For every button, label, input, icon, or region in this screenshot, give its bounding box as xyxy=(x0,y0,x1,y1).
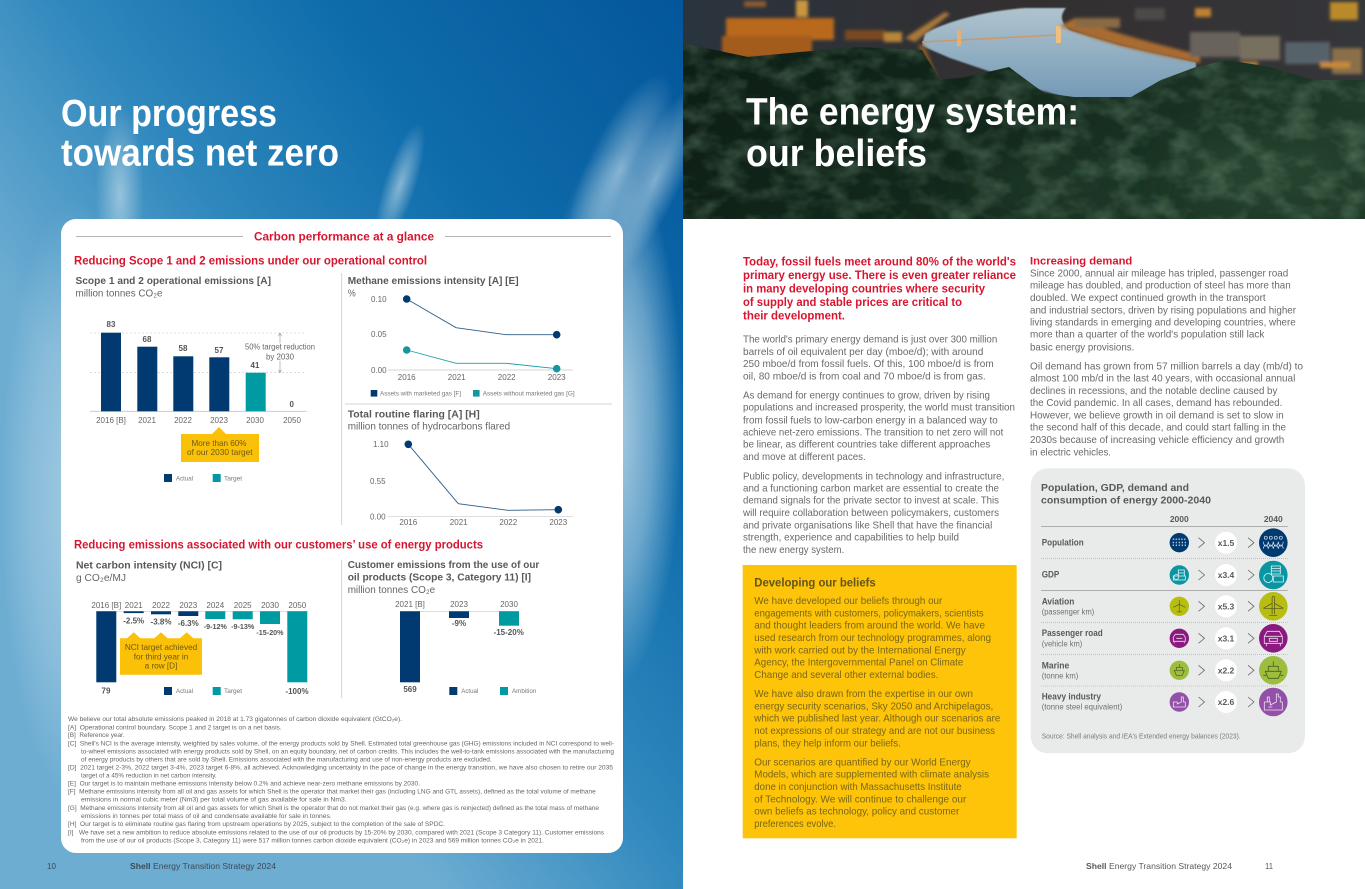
title: right page xyxy=(746,92,1079,175)
icon: passenger road small xyxy=(1170,629,1189,648)
bar chart: net carbon intensity: 2022 xyxy=(152,601,170,610)
footnotes: from the use of our oil products (Scope 3, Category 11) were 517 million tonnes carbon dioxide equivalent (CO₂e) in 2023 and 569 million tonnes CO₂e in 2021. xyxy=(81,838,544,845)
photo: forest silhouette xyxy=(683,43,1365,219)
callout text: not expressions of our strategy and are not our business xyxy=(754,725,995,737)
callout text: with work carried out by the International Energy xyxy=(753,645,966,657)
title: left page xyxy=(61,93,339,174)
body text: primary energy demand: demand signals for the private sector to invest at scale. This xyxy=(743,495,999,507)
bar chart: customer emissions: 569 xyxy=(403,685,417,694)
annotation: 50% target reduction arrow xyxy=(245,333,315,373)
footnotes: of energy products by others that are sold by Shell. Emissions associated with the manufacturing and use of non-energy products are excluded. xyxy=(81,757,492,764)
icon: heavy industry large xyxy=(1259,688,1288,716)
legend: Actual xyxy=(176,476,194,482)
text block: increasing demand: more than a quarter of the world's population still lack xyxy=(1030,329,1265,341)
panel heading: Population, GDP, demand and xyxy=(1041,482,1189,494)
lead paragraph: of supply and stable prices are critical to xyxy=(743,297,962,309)
callout text: plans, they help inform our beliefs. xyxy=(754,737,901,749)
bar chart: customer emissions xyxy=(348,559,539,695)
footnotes: emissions in normal cubic meter (Nm3) per total volume of gas available for sale in Nm3. xyxy=(81,797,347,804)
bar chart: scope 1 and 2 operational emissions: 2022 xyxy=(174,416,192,425)
lead paragraph xyxy=(743,256,1016,322)
text block: increasing demand: 2030s because of increasing vehicle efficiency and growth xyxy=(1030,434,1284,446)
bar chart: customer emissions: 2023 xyxy=(450,600,468,609)
bar chart: net carbon intensity: -15-20% xyxy=(256,628,284,637)
photo: castle xyxy=(722,0,950,88)
body text: primary energy demand: As demand for energy continues to grow, driven by rising xyxy=(743,390,990,402)
bar chart: scope 1 and 2 operational emissions: 2050 xyxy=(283,416,301,425)
section heading: scope 1 and 2: Reducing Scope 1 and 2 emissions under our operational control xyxy=(74,254,427,268)
lead paragraph: Today, fossil fuels meet around 80% of the world's xyxy=(743,256,1016,268)
bar chart: scope 1 and 2 operational emissions: 58 xyxy=(179,344,188,353)
row: passenger road: x3.1 xyxy=(1218,633,1235,643)
bar chart: net carbon intensity: 2024 xyxy=(206,601,225,610)
lead paragraph: their development. xyxy=(743,310,845,322)
bar chart: customer emissions: oil products (Scope 3, Category 11) [I] xyxy=(348,572,531,584)
body text: primary energy demand: the new energy system. xyxy=(743,544,844,556)
footnotes xyxy=(68,716,614,845)
footnotes: [G] Methane emissions intensity from all oil and gas assets for which Shell is the operator that do not market their gas (e.g. where gas is reinjected) defined as the total mass of methane xyxy=(68,805,599,812)
row: aviation xyxy=(1042,592,1288,621)
icon: heavy industry small xyxy=(1170,692,1189,712)
text block: increasing demand: and industrial sectors, driven by rising populations and higher xyxy=(1030,304,1296,316)
bar chart: customer emissions: 2030 xyxy=(500,600,518,609)
legend: Actual xyxy=(176,688,194,695)
legend: Assets without marketed gas [G] xyxy=(483,390,575,398)
bar chart: customer emissions: Customer emissions from the use of our xyxy=(348,559,539,571)
callout text: engagements with customers, policymakers, scientists xyxy=(754,608,984,620)
panel: population, GDP, demand and consumption xyxy=(1031,468,1305,753)
section heading: customers: Reducing emissions associated with our customers’ use of energy products xyxy=(74,538,483,552)
footnotes: [C] Shell's NCI is the average intensity, weighted by sales volume, of the energy products sold by Shell. Estimated total greenhouse gas (GHG) emissions included in NCI correspond to well- xyxy=(68,741,614,748)
footer: right page: Shell Energy Transition Strategy 2024 xyxy=(1086,861,1232,871)
icon: aviation large xyxy=(1259,592,1288,621)
footnotes: emissions in tonnes per total mass of oil and condensate available for sale in tonnes. xyxy=(81,813,332,820)
title: left page: towards net zero xyxy=(61,132,339,174)
body text: primary energy demand xyxy=(742,334,1015,556)
legend xyxy=(164,474,242,482)
line chart: methane emissions intensity: 2023 xyxy=(548,373,566,382)
row: GDP: x3.4 xyxy=(1218,570,1235,580)
bar chart: customer emissions: -15-20% xyxy=(494,628,524,637)
callout text: done in conjunction with Massachusetts Institute xyxy=(754,781,962,793)
row: passenger road: Passenger road xyxy=(1042,628,1103,638)
line chart: total routine flaring: Total routine flaring [A] [H] xyxy=(348,408,480,420)
body text: primary energy demand: be linear, as different countries take different approaches xyxy=(743,439,990,451)
body text: primary energy demand: barrels of oil equivalent per day (mboe/d); with around xyxy=(743,346,983,358)
bar chart: customer emissions: 2021 [B] xyxy=(395,600,425,609)
lead paragraph: primary energy use. There is even greater reliance xyxy=(743,270,1016,282)
panel: carbon performance at a glance xyxy=(61,219,623,853)
footer: left page: 10 xyxy=(47,861,56,871)
text block: increasing demand: declines in recessions, and the notable decline caused by xyxy=(1030,385,1278,397)
footer: left page xyxy=(47,861,276,871)
legend xyxy=(449,687,537,695)
text block: increasing demand xyxy=(1030,256,1303,458)
row: aviation: x5.3 xyxy=(1218,601,1235,611)
line chart: methane emissions intensity: 0.05 xyxy=(371,330,387,339)
annotation: 50% target reduction arrow: by 2030 xyxy=(266,352,295,362)
photo: far bank and city xyxy=(1060,2,1362,74)
bar chart: net carbon intensity: -9-13% xyxy=(231,622,255,631)
legend: Target xyxy=(224,476,242,482)
panel heading: consumption of energy 2000-2040 xyxy=(1041,494,1211,506)
callout: more than 60% of our 2030 target: More than 60% xyxy=(192,439,246,448)
icon: GDP small xyxy=(1170,565,1189,585)
line chart: total routine flaring: 0.55 xyxy=(370,477,386,486)
icon: aviation small xyxy=(1170,597,1189,616)
callout text: used research from our technology programmes, along xyxy=(754,632,991,644)
icon: marine large xyxy=(1259,656,1288,685)
bar chart: scope 1 and 2 operational emissions: 2023 xyxy=(210,416,228,425)
line chart: methane emissions intensity: 0.10 xyxy=(371,295,387,304)
text block: increasing demand: the Covid pandemic. In all cases, demand has rebounded. xyxy=(1030,397,1282,409)
row: heavy industry xyxy=(1042,688,1288,716)
footer: left page: Shell Energy Transition Strategy 2024 xyxy=(130,861,276,871)
line chart: methane emissions intensity: 0.00 xyxy=(371,366,387,375)
bar chart: customer emissions: -9% xyxy=(452,619,466,628)
callout text: of Technology. We will continue to challenge our xyxy=(754,793,967,805)
bar chart: scope 1 and 2 operational emissions: 2021 xyxy=(138,416,156,425)
text block: increasing demand: doubled. We expect continued growth in the transport xyxy=(1030,292,1266,304)
bar chart: net carbon intensity: -9-12% xyxy=(204,622,227,631)
line chart: total routine flaring: 2023 xyxy=(549,518,568,527)
line chart: methane emissions intensity xyxy=(348,275,575,398)
bar chart: scope 1 and 2 operational emissions: million tonnes CO₂e xyxy=(76,288,163,300)
line chart: total routine flaring: 1.10 xyxy=(373,440,389,449)
line chart: methane emissions intensity: Methane emissions intensity [A] [E] xyxy=(348,275,519,287)
callout: NCI target achieved xyxy=(120,632,202,675)
row: marine xyxy=(1042,656,1288,685)
callout text: energy security scenarios, Sky 2050 and Archipelagos, xyxy=(754,700,993,712)
bar chart: net carbon intensity: -6.3% xyxy=(178,619,199,628)
bar chart: net carbon intensity: -3.8% xyxy=(151,618,171,626)
panel heading xyxy=(1041,482,1211,506)
column headers: 2040 xyxy=(1264,514,1283,524)
row: population xyxy=(1042,528,1288,557)
bar chart: net carbon intensity: Net carbon intensity (NCI) [C] xyxy=(76,560,222,572)
body text: primary energy demand: and a functioning carbon market are essential to create the xyxy=(743,483,999,495)
bar chart: net carbon intensity: 2021 xyxy=(125,601,143,610)
callout text: We have also drawn from the expertise in our own xyxy=(754,688,973,700)
bar chart: scope 1 and 2 operational emissions: Scope 1 and 2 operational emissions [A] xyxy=(76,275,271,287)
callout text: Change and several other external bodies. xyxy=(754,669,938,681)
legend: Actual xyxy=(461,688,479,695)
title: left page: Our progress xyxy=(61,93,277,135)
row: population: x1.5 xyxy=(1218,538,1235,548)
footnotes: [A] Operational control boundary. Scope 1 and 2 target is on a net basis. xyxy=(68,724,282,731)
line chart: methane emissions intensity: 2022 xyxy=(498,373,516,382)
bar chart: net carbon intensity: -100% xyxy=(285,687,309,696)
row: marine: (tonne km) xyxy=(1042,670,1078,680)
bar chart: net carbon intensity: 79 xyxy=(102,686,111,696)
footnotes: [E] Our target is to maintain methane emissions intensity below 0.2% and achieve near-zero methane emissions by 2030. xyxy=(68,781,420,788)
bar chart: net carbon intensity: 2030 xyxy=(261,601,279,610)
callout text: Our scenarios are quantified by our World Energy xyxy=(754,756,971,768)
footer: right page: 11 xyxy=(1265,861,1273,871)
column headers: 2000 xyxy=(1170,514,1189,524)
body text: primary energy demand: achieve net-zero emissions. The transition to net zero will not xyxy=(743,427,1003,439)
body text: primary energy demand: populations and increased prosperity, the world must transition xyxy=(743,402,1015,414)
line chart: total routine flaring: 2016 xyxy=(399,518,418,527)
callout heading: Developing our beliefs xyxy=(754,576,876,590)
text block: increasing demand: mileage has doubled, and production of steel has more than xyxy=(1030,280,1291,292)
line chart: total routine flaring: 2021 xyxy=(450,518,468,527)
sub-heading: Increasing demand xyxy=(1030,256,1132,268)
row: heavy industry: x2.6 xyxy=(1218,697,1235,707)
row: GDP: GDP xyxy=(1042,570,1059,580)
line chart: total routine flaring: 2022 xyxy=(499,518,518,527)
icon: passenger road large xyxy=(1259,624,1288,653)
footnotes: [B] Reference year. xyxy=(68,732,125,739)
row: passenger road xyxy=(1042,624,1288,653)
legend xyxy=(371,390,575,398)
text block: increasing demand: in electric vehicles. xyxy=(1030,446,1111,458)
callout text: own beliefs as technology, policy and customer xyxy=(754,805,960,817)
title: right page: our beliefs xyxy=(746,133,927,175)
row: marine: Marine xyxy=(1042,660,1069,670)
legend xyxy=(164,687,242,695)
bar chart: net carbon intensity: 2023 xyxy=(179,601,198,610)
row: passenger road: (vehicle km) xyxy=(1042,638,1082,648)
row: GDP xyxy=(1042,561,1288,589)
legend: Assets with marketed gas [F] xyxy=(380,390,461,398)
icon: population small xyxy=(1170,533,1189,552)
bar chart: scope 1 and 2 operational emissions: 68 xyxy=(143,335,152,344)
bar chart: net carbon intensity xyxy=(76,560,309,696)
bar chart: scope 1 and 2 operational emissions: 41 xyxy=(251,361,260,370)
row: population: Population xyxy=(1042,538,1084,548)
text block: increasing demand: Oil demand has grown from 57 million barrels a day (mb/d) to xyxy=(1030,360,1303,372)
text block: increasing demand: basic energy provisions. xyxy=(1030,341,1134,353)
footnotes: [I] We have set a new ambition to reduce absolute emissions related to the use of our oil products by 15-20% by 2030, compared with 2021 (Scope 3 Category 11). Customer emissions xyxy=(68,829,605,836)
text block: increasing demand: the second half of this decade, and could start falling in the xyxy=(1030,422,1286,434)
legend: Ambition xyxy=(512,688,537,695)
bar chart: net carbon intensity: 2025 xyxy=(234,601,252,610)
body text: primary energy demand: will require collaboration between policymakers, customers xyxy=(742,507,999,519)
callout: NCI target achieved: for third year in xyxy=(134,652,189,662)
line chart: methane emissions intensity: 2021 xyxy=(448,373,466,382)
photo: bridge xyxy=(922,26,1061,46)
line chart: total routine flaring: million tonnes of hydrocarbons flared xyxy=(348,420,510,432)
bar chart: scope 1 and 2 operational emissions: 2016 [B] xyxy=(96,416,126,425)
body text: primary energy demand: The world's primary energy demand is just over 300 million xyxy=(743,334,997,346)
photo: river xyxy=(922,8,1196,104)
body text: primary energy demand: from fossil fuels to low-carbon energy in a balanced way to xyxy=(743,414,998,426)
callout text: Agency, the Intergovernmental Panel on Climate xyxy=(754,657,963,669)
callout text xyxy=(753,595,1000,830)
footnotes: to-wheel emissions associated with energy products sold by Shell, on an equity boundary, net of carbon credits. This includes the well-to-tank emissions associated with the manufacturing xyxy=(81,749,614,756)
footnotes: [H] Our target is to eliminate routine gas flaring from upstream operations by 2025, subject to the completion of the sale of SPDC. xyxy=(68,821,445,828)
bar chart: net carbon intensity: -2.5% xyxy=(123,616,144,626)
row: aviation: Aviation xyxy=(1042,596,1074,606)
line chart: total routine flaring: 0.00 xyxy=(370,513,386,522)
body text: primary energy demand: oil, 80 mboe/d is from coal and 70 mboe/d is from gas. xyxy=(743,370,986,382)
callout: more than 60% of our 2030 target: of our 2030 target xyxy=(187,448,253,457)
bar chart: net carbon intensity: 2016 [B] xyxy=(91,601,121,610)
line chart: methane emissions intensity: 2016 xyxy=(398,373,416,382)
icon: population large xyxy=(1259,528,1288,557)
bar chart: scope 1 and 2 operational emissions: 83 xyxy=(107,320,116,329)
body text: primary energy demand: and private organisations like Shell that have the financial xyxy=(743,519,992,531)
annotation: 50% target reduction arrow: 50% target reduction xyxy=(245,342,315,352)
source note: Source: Shell analysis and IEA's Extended energy balances (2023). xyxy=(1042,732,1241,740)
icon: marine small xyxy=(1170,661,1189,680)
body text: primary energy demand: and move at different paces. xyxy=(743,451,866,463)
callout text: We have developed our beliefs through our xyxy=(754,595,943,607)
panel heading: Carbon performance at a glance xyxy=(254,230,434,244)
bar chart: scope 1 and 2 operational emissions: 2030 xyxy=(246,416,264,425)
page background: sky photo xyxy=(0,0,723,889)
body text: primary energy demand: 250 mboe/d from fossil fuels. Of this, 100 mboe/d is from xyxy=(743,358,994,370)
bar chart: net carbon intensity: 2050 xyxy=(288,601,307,610)
row: aviation: (passenger km) xyxy=(1042,607,1094,617)
callout panel: developing our beliefs xyxy=(743,565,1017,838)
callout text: Models, which are supplemented with climate analysis xyxy=(754,769,989,781)
footnotes: [F] Methane emissions intensity from all oil and gas assets for which Shell is the operator that market their gas (including LNG and GTL assets), defined as the total volume of methane xyxy=(68,789,596,796)
bar chart: scope 1 and 2 operational emissions: 57 xyxy=(215,346,224,355)
title: right page: The energy system: xyxy=(746,92,1079,134)
column headers xyxy=(1170,514,1283,524)
text block: increasing demand: However, we believe growth in oil demand is set to slow in xyxy=(1030,409,1284,421)
footnotes: We believe our total absolute emissions peaked in 2018 at 1.73 gigatonnes of carbon dioxide equivalent (GtCO₂e). xyxy=(68,716,402,723)
text block: increasing demand: almost 100 mb/d in the last 40 years, with occasional annual xyxy=(1030,373,1295,385)
callout text: and thought leaders from around the world. We have xyxy=(754,620,985,632)
icon: GDP large xyxy=(1259,561,1288,589)
row: marine: x2.2 xyxy=(1218,665,1235,675)
text block: increasing demand: living standards in emerging and developing countries, where xyxy=(1030,317,1296,329)
text block: increasing demand: Since 2000, annual air mileage has tripled, passenger road xyxy=(1030,268,1288,280)
callout: more than 60% of our 2030 target xyxy=(181,427,259,462)
footnotes: target of a 45% reduction in net carbon intensity. xyxy=(81,773,217,780)
bar chart: customer emissions: million tonnes CO₂e xyxy=(348,584,435,596)
legend: Target xyxy=(224,688,242,695)
callout: NCI target achieved: NCI target achieved xyxy=(125,643,198,652)
row: heavy industry: Heavy industry xyxy=(1042,692,1101,702)
footnotes: [D] 2021 target 2-3%, 2022 target 3-4%, 2023 target 6-8%, all achieved. Acknowledging uncertainty in the pace of change in the energy transition, we have also chosen to retire our 2035 xyxy=(68,765,613,772)
header photo: city at dusk with river and forest xyxy=(683,0,1365,219)
body text: primary energy demand: Public policy, developments in technology and infrastructure, xyxy=(743,470,1004,482)
row: heavy industry: (tonne steel equivalent) xyxy=(1042,701,1122,711)
callout text: preferences evolve. xyxy=(754,818,836,830)
callout text: which we published last year. Although our scenarios are xyxy=(753,713,1000,725)
bar chart: net carbon intensity: g CO₂e/MJ xyxy=(76,572,126,584)
lead paragraph: in many developing countries where security xyxy=(743,284,986,296)
bar chart: scope 1 and 2 operational emissions: 0 xyxy=(289,400,294,409)
line chart: total routine flaring xyxy=(348,408,573,527)
bar chart: scope 1 and 2 operational emissions xyxy=(76,275,315,482)
body text: primary energy demand: strength, experience and capabilities to help build xyxy=(743,531,959,543)
line chart: methane emissions intensity: % xyxy=(348,288,356,300)
callout: NCI target achieved: a row [D] xyxy=(145,662,177,670)
